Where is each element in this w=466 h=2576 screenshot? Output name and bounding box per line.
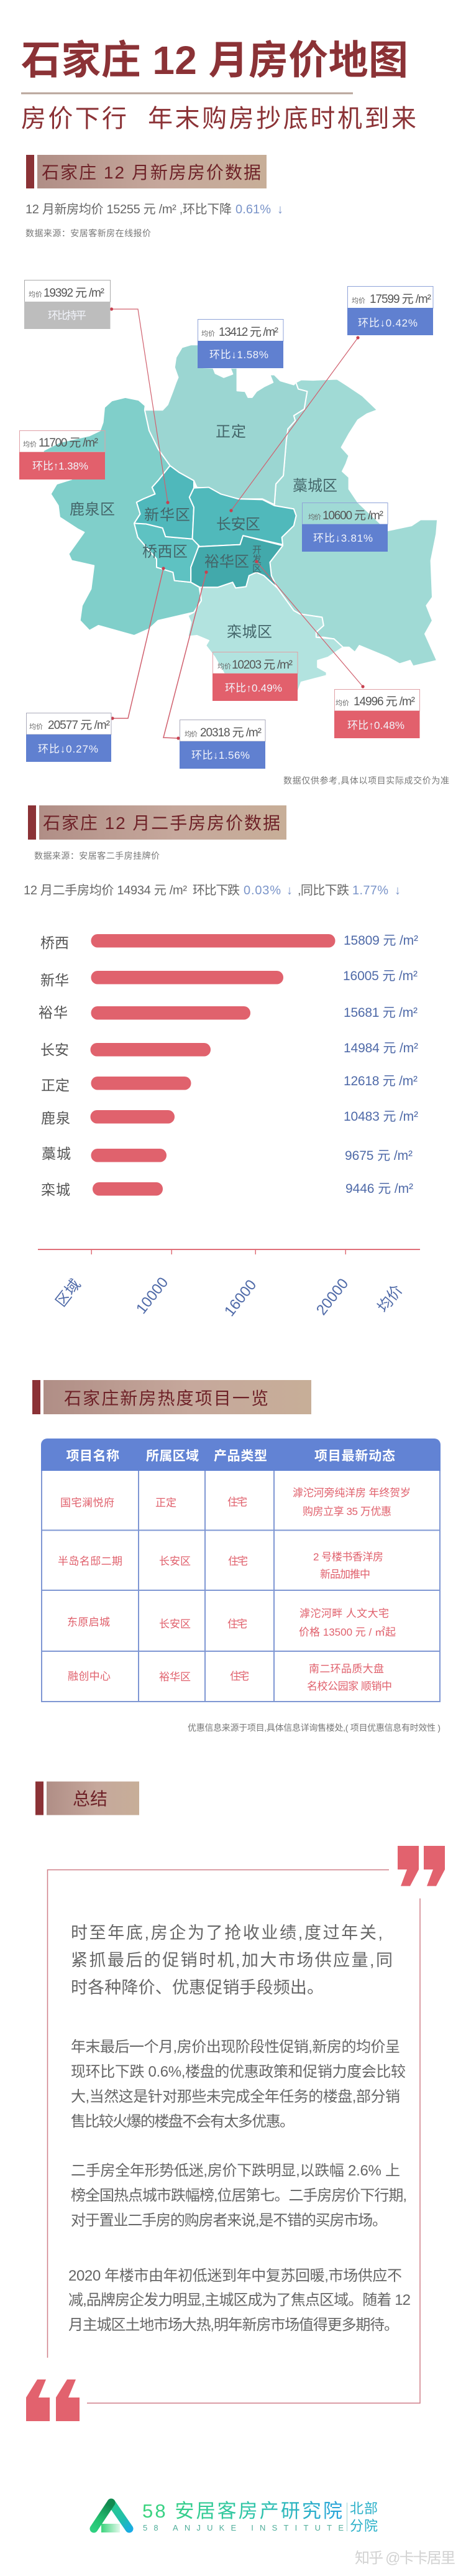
icon: opening quote mark [26, 2379, 80, 2421]
data source note: 数据来源：安居客新房在线报价 [25, 228, 151, 238]
summary paragraph 2: 年末最后一个月,房价出现阶段性促销,新房的均价呈 [71, 2039, 400, 2055]
callout: Qiaoxi 20577 [26, 713, 111, 762]
callout: Luquan 11700 [19, 430, 105, 480]
summary paragraph 4: 2020 年楼市由年初低迷到年中复苏回暖,市场供应不 [68, 2268, 402, 2284]
row: 国宅澜悦府: 购房立享 35 万优惠 [303, 1506, 391, 1517]
title: 石家庄 12 月房价地图 [21, 38, 408, 83]
summary frame [47, 1869, 420, 2403]
table header: 项目名称 [66, 1449, 119, 1463]
callout: Chang'an 17599 [347, 286, 433, 335]
row: 东原启城: 住宅 [227, 1618, 247, 1630]
bar row: Qiaoxi: 15809 元 /m² [344, 934, 418, 948]
row: 东原启城 [67, 1608, 396, 1638]
bar row: Gaocheng [42, 1146, 413, 1163]
bar chart: second-hand prices by district [39, 934, 418, 1198]
project table [41, 1439, 441, 1702]
bar row: Chang'an: 14984 元 /m² [344, 1041, 418, 1055]
map region: Yuhua [191, 535, 283, 588]
callout: Luancheng 10203: 10203 元 /m² [232, 659, 293, 672]
bar row: Luancheng: 栾城 [41, 1182, 70, 1198]
logo: 58 Anjuke Institute: 分院 [350, 2518, 378, 2534]
map region: Xinhua [134, 466, 194, 539]
callout: Qiaoxi 20577: 均价 [29, 723, 43, 731]
bar row: Xinhua: 16005 元 /m² [343, 969, 418, 983]
summary paragraph 3: 对于置业二手房的购房者来说,是不错的买房市场。 [71, 2212, 387, 2229]
callout: Chang'an 17599: 均价 [352, 297, 365, 305]
map district labels: 正定 [216, 424, 246, 440]
chart axis: 16000 [221, 1277, 260, 1320]
callout: Qiaoxi 20577: 20577 元 /m² [48, 719, 110, 732]
callout: Kaifa district 14996 [334, 689, 420, 738]
second-hand price statement: ,同比下跌 [298, 883, 349, 897]
second-hand data source: 数据来源：安居客二手房挂牌价 [34, 851, 160, 861]
bar row: Yuhua [39, 1004, 418, 1021]
second-hand price statement: ↓ [395, 884, 401, 897]
second-hand price statement: 1.77% [352, 884, 388, 897]
summary paragraph 4 [68, 2268, 411, 2333]
callout: Chang'an 17599: 17599 元 /m² [370, 293, 431, 306]
summary paragraph 1: 紧抓最后的促销时机,加大市场供应量,同 [71, 1951, 393, 1970]
map district labels: 裕华区 [204, 554, 249, 570]
callout: Gaocheng 10600 [302, 503, 388, 552]
new home average price statement: 12 月新房均价 15255 元 /m² ,环比下降 [25, 202, 232, 216]
callout: Zhengding 13412 [198, 320, 283, 368]
row: 融创中心: 南二环品质大盘 [309, 1663, 384, 1675]
bar row: Xinhua [40, 969, 418, 988]
district map [43, 345, 437, 699]
callout: Luquan 11700: 11700 元 /m² [39, 437, 98, 450]
map region: Qiaoxi [134, 523, 198, 582]
map district labels: 鹿泉区 [70, 501, 115, 518]
watermark: 知乎 @卡卡居里 [355, 2550, 455, 2567]
summary paragraph 4: 月主城区土地市场大热,明年新房市场值得更多期待。 [68, 2317, 399, 2333]
section heading: summary [35, 1781, 139, 1815]
row: 融创中心: 裕华区 [159, 1671, 191, 1683]
callout: Xinhua 19392: 环比持平 [48, 310, 86, 322]
section heading: second-hand prices: 石家庄 12 月二手房房价数据 [43, 813, 280, 833]
row: 融创中心 [68, 1663, 392, 1692]
row: 融创中心: 融创中心 [68, 1670, 111, 1682]
callout: Yuhua 20318 [180, 720, 265, 769]
section heading: hot projects: 石家庄新房热度项目一览 [64, 1389, 268, 1408]
table header: 产品类型 [214, 1449, 267, 1463]
section heading: second-hand prices [28, 805, 286, 840]
section heading: hot projects [32, 1380, 311, 1414]
callout: Luquan 11700: 环比↑1.38% [32, 460, 88, 472]
second-hand price statement: 环比下跌 [193, 883, 240, 897]
new home average price statement: ↓ [277, 203, 283, 216]
map district labels: 藁城区 [293, 478, 337, 494]
second-hand price statement: ↓ [286, 884, 293, 897]
row: 国宅澜悦府: 住宅 [227, 1496, 247, 1508]
logo: 58 Anjuke Institute: 58 ANJUKE INSTITUTE [143, 2523, 344, 2532]
leader lines [110, 307, 365, 740]
icon: closing quote mark [398, 1846, 445, 1886]
row: 国宅澜悦府: 国宅澜悦府 [60, 1497, 114, 1509]
chart axis [38, 1249, 420, 1320]
summary paragraph 2: 现环比下跌 0.6%,楼盘的优惠政策和促销力度会比较 [71, 2064, 406, 2080]
map district labels: 发 [252, 554, 262, 565]
map district labels: 开 [252, 545, 262, 555]
callout: Zhengding 13412: 均价 [201, 330, 215, 338]
callout: Xinhua 19392: 均价 [29, 290, 42, 299]
subtitle [21, 105, 416, 132]
second-hand price statement: 12 月二手房均价 14934 元 /m² [24, 883, 187, 897]
row: 融创中心: 住宅 [230, 1670, 249, 1682]
bar row: Chang'an [40, 1041, 418, 1058]
map district labels: 区 [252, 563, 262, 574]
map district labels: 栾城区 [227, 624, 272, 641]
summary paragraph 1: 时各种降价、优惠促销手段频出。 [71, 1978, 324, 1997]
callout: Qiaoxi 20577: 环比↓0.27% [38, 743, 98, 755]
map district labels [70, 424, 337, 641]
map district labels: 桥西区 [142, 544, 188, 560]
callout: Xinhua 19392 [24, 280, 111, 329]
chart axis: 20000 [313, 1276, 352, 1318]
map region: Luancheng [188, 572, 343, 699]
subtitle: 年末购房抄底时机到来 [148, 105, 416, 132]
map region: Luquan [43, 397, 201, 636]
row: 半岛名邸二期: 半岛名邸二期 [58, 1555, 122, 1567]
summary paragraph 3: 榜全国热点城市跌幅榜,位居第七。二手房房价下行期, [71, 2187, 407, 2204]
table header: 所属区域 [146, 1449, 199, 1463]
chart axis: 10000 [133, 1274, 171, 1317]
bar row: Yuhua: 裕华 [39, 1004, 68, 1021]
callout: Gaocheng 10600: 10600 元 /m² [322, 509, 383, 522]
bar row: Luancheng: 9446 元 /m² [345, 1182, 413, 1196]
subtitle: 房价下行 [21, 105, 127, 132]
bar row: Xinhua: 新华 [40, 972, 69, 988]
callout: Zhengding 13412: 13412 元 /m² [219, 326, 278, 339]
summary paragraph 1 [71, 1924, 393, 1997]
row: 东原启城: 价格 13500 元 / ㎡起 [299, 1626, 396, 1638]
bar row: Zhengding [41, 1074, 418, 1093]
section heading: summary: 总结 [73, 1789, 107, 1809]
table header [41, 1439, 441, 1471]
section heading: new home prices [26, 155, 267, 188]
callout: Luancheng 10203 [212, 652, 298, 701]
bar row: Gaocheng: 藁城 [42, 1146, 71, 1162]
row: 东原启城: 长安区 [159, 1618, 191, 1630]
new home average price statement: 0.61% [235, 203, 271, 216]
map disclaimer: 数据仅供参考,具体以项目实际成交价为准 [283, 776, 449, 785]
callout: Chang'an 17599: 环比↓0.42% [358, 317, 418, 329]
row: 国宅澜悦府 [60, 1487, 411, 1517]
row: 半岛名邸二期: 长安区 [159, 1555, 191, 1567]
logo mark [94, 2503, 129, 2532]
map region: Chang'an [190, 488, 296, 547]
callout: Kaifa district 14996: 14996 元 /m² [354, 695, 415, 708]
row: 东原启城: 东原启城 [67, 1616, 110, 1628]
summary paragraph 3 [71, 2162, 407, 2229]
bar row: Qiaoxi [40, 934, 418, 951]
section heading: new home prices: 石家庄 12 月新房房价数据 [42, 163, 261, 182]
row: 东原启城: 滹沱河畔 人文大宅 [299, 1608, 389, 1619]
chart axis: 均价 [375, 1282, 406, 1316]
callout: Luancheng 10203: 环比↑0.49% [225, 682, 282, 694]
callout: Gaocheng 10600: 均价 [308, 513, 321, 521]
callout: Luancheng 10203: 均价 [217, 662, 231, 670]
callout: Luquan 11700: 均价 [23, 440, 37, 448]
bar row: Zhengding: 正定 [41, 1077, 70, 1093]
summary paragraph 2 [71, 2039, 406, 2130]
map district labels: 长安区 [216, 516, 260, 533]
row: 国宅澜悦府: 滹沱河旁纯洋房 年终贺岁 [293, 1487, 411, 1499]
callout: Yuhua 20318: 均价 [185, 730, 198, 738]
callout: Yuhua 20318: 环比↓1.56% [191, 749, 250, 761]
callout: Zhengding 13412: 环比↓1.58% [209, 349, 268, 361]
callout: Kaifa district 14996: 环比↑0.48% [347, 720, 404, 731]
callout: Xinhua 19392: 19392 元 /m² [43, 287, 104, 300]
map district labels: 新华区 [144, 507, 190, 524]
bar row: Luquan: 鹿泉 [41, 1110, 70, 1126]
callout: Kaifa district 14996: 均价 [336, 699, 349, 707]
bar row: Luquan [41, 1110, 418, 1126]
bar row: Gaocheng: 9675 元 /m² [345, 1149, 413, 1163]
summary paragraph 1: 时至年底,房企为了抢收业绩,度过年关, [71, 1924, 383, 1942]
second-hand price statement: 0.03% [244, 884, 281, 897]
row: 半岛名邸二期 [58, 1551, 383, 1580]
logo: 58 Anjuke Institute: 北部 [350, 2501, 378, 2516]
summary paragraph 4: 减,品牌房企发力明显,主城区成为了焦点区域。随着 12 [68, 2292, 411, 2309]
second-hand price statement [24, 883, 401, 897]
bar row: Yuhua: 15681 元 /m² [344, 1006, 418, 1020]
map region: Zhengding [145, 345, 307, 504]
callout: Yuhua 20318: 20318 元 /m² [200, 726, 262, 739]
map region: Gaocheng [270, 379, 437, 666]
summary paragraph 2: 售比较火爆的楼盘不会有太多优惠。 [71, 2113, 295, 2130]
bar row: Qiaoxi: 桥西 [40, 935, 69, 951]
callout: Gaocheng 10600: 环比↓3.81% [313, 532, 373, 544]
bar row: Chang'an: 长安 [40, 1042, 69, 1058]
row: 国宅澜悦府: 正定 [155, 1497, 176, 1509]
row: 融创中心: 名校公园家 顺销中 [307, 1680, 392, 1692]
logo: 58 Anjuke Institute [94, 2500, 378, 2534]
bar row: Zhengding: 12618 元 /m² [344, 1074, 418, 1088]
summary paragraph 3: 二手房全年形势低迷,房价下跌明显,以跌幅 2.6% 上 [71, 2162, 400, 2179]
chart axis: 区域 [53, 1276, 85, 1310]
row: 半岛名邸二期: 2 号楼书香洋房 [313, 1551, 383, 1563]
row: 半岛名邸二期: 新品加推中 [320, 1568, 370, 1580]
table header: 项目最新动态 [314, 1448, 395, 1463]
bar row: Luquan: 10483 元 /m² [344, 1110, 418, 1124]
row: 半岛名邸二期: 住宅 [228, 1555, 248, 1567]
summary paragraph 2: 大,当然这是针对那些未完成全年任务的楼盘,部分销 [71, 2088, 400, 2105]
bar row: Luancheng [41, 1182, 413, 1198]
logo: 58 Anjuke Institute: 58 安居客房产研究院 [142, 2500, 342, 2522]
table footnote: 优惠信息来源于项目,具体信息详询售楼处,( 项目优惠信息有时效性 ) [188, 1723, 441, 1733]
